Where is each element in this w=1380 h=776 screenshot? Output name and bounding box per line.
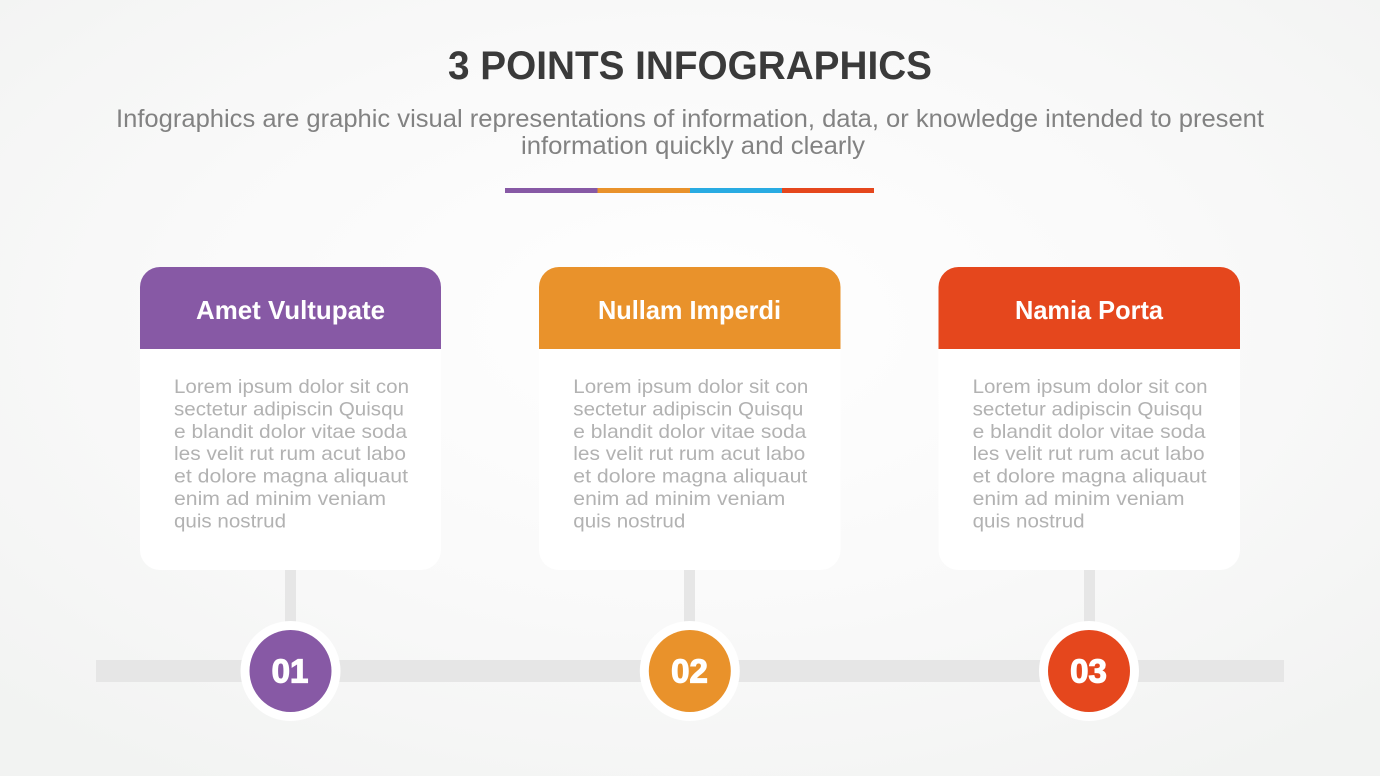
body text 1: enim ad minim veniam — [174, 488, 386, 510]
body text 1: Lorem ipsum dolor sit con — [174, 376, 409, 398]
card body 1 — [140, 267, 441, 570]
body text 3: sectetur adipiscin Quisqu — [973, 398, 1203, 420]
heading 1: Amet Vultupate — [196, 295, 385, 325]
body text 1: e blandit dolor vitae soda — [174, 421, 407, 443]
body text 1: quis nostrud — [174, 510, 286, 532]
number badge 02 — [640, 621, 740, 721]
panel: Nullam Imperdi — [539, 267, 840, 721]
body text 1 — [174, 376, 409, 532]
body text 2: sectetur adipiscin Quisqu — [573, 398, 803, 420]
card header 1 — [140, 267, 441, 349]
body text 2: e blandit dolor vitae soda — [573, 421, 806, 443]
body text 3: enim ad minim veniam — [973, 488, 1185, 510]
heading 3: Namia Porta — [1015, 295, 1164, 325]
connector 3 — [1084, 570, 1095, 624]
card header 3 — [938, 267, 1240, 349]
heading 2: Nullam Imperdi — [598, 295, 781, 325]
number badge 03 — [1039, 621, 1139, 721]
body text 3: Lorem ipsum dolor sit con — [973, 376, 1208, 398]
body text 3: e blandit dolor vitae soda — [973, 421, 1206, 443]
card header 2 — [539, 267, 840, 349]
body text 2 — [573, 376, 808, 532]
panel: Namia Porta — [938, 267, 1240, 721]
number badge 01 — [240, 621, 340, 721]
subtitle: Infographics are graphic visual representations of information, data, or knowledge intended to present — [116, 105, 1264, 133]
body text 2: enim ad minim veniam — [573, 488, 785, 510]
number badge 02: 02 — [671, 652, 708, 690]
timeline bar — [96, 660, 1284, 682]
connector 2 — [684, 570, 695, 624]
body text 3: quis nostrud — [973, 510, 1085, 532]
body text 3: et dolore magna aliquaut — [973, 466, 1207, 488]
body text 3: les velit rut rum acut labo — [973, 443, 1205, 465]
body text 2: et dolore magna aliquaut — [573, 466, 808, 488]
connector 1 — [285, 570, 296, 624]
number badge 01: 01 — [272, 652, 308, 690]
body text 2: les velit rut rum acut labo — [573, 443, 805, 465]
number badge 03: 03 — [1070, 652, 1107, 690]
body text 2: quis nostrud — [573, 510, 685, 532]
body text 3 — [973, 376, 1208, 532]
card body 3 — [938, 267, 1240, 570]
subtitle: information quickly and clearly — [521, 132, 865, 160]
panel: Amet Vultupate — [140, 267, 441, 721]
subtitle — [116, 105, 1264, 160]
body text 1: et dolore magna aliquaut — [174, 466, 409, 488]
card body 2 — [539, 267, 840, 570]
body text 2: Lorem ipsum dolor sit con — [573, 376, 808, 398]
colour divider — [505, 188, 874, 193]
body text 1: les velit rut rum acut labo — [174, 443, 406, 465]
body text 1: sectetur adipiscin Quisqu — [174, 398, 404, 420]
title: 3 POINTS INFOGRAPHICS — [448, 44, 932, 88]
